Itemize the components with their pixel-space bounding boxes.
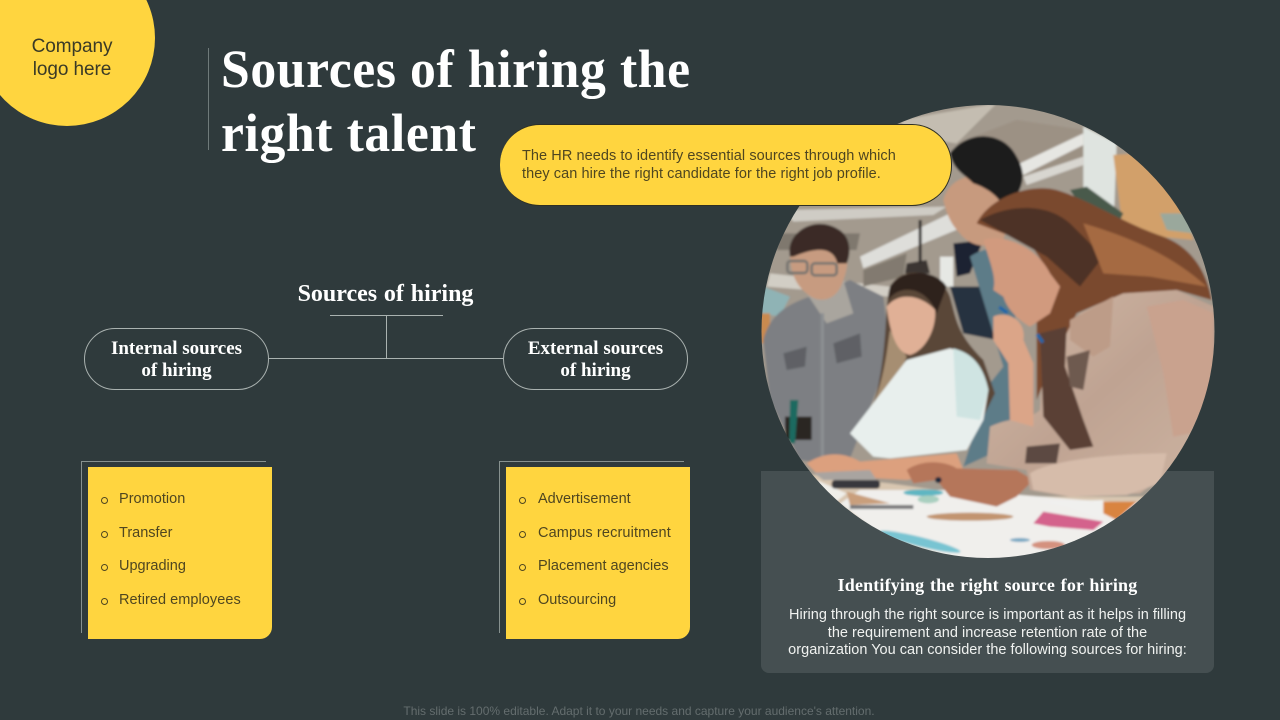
external list: Placement agencies: [538, 558, 669, 574]
external list: Campus recruitment: [538, 525, 671, 541]
logo badge: [0, 0, 155, 126]
logo text: logo here: [33, 59, 111, 80]
man left: [763, 280, 890, 467]
panel heading: Identifying the right source for hiring: [838, 575, 1137, 595]
logo text: Company: [32, 36, 112, 57]
internal list: [88, 467, 272, 639]
external list: [506, 467, 690, 639]
logo text: [32, 36, 112, 80]
pill: internal: Internal sources: [111, 338, 242, 359]
pill: external: [503, 328, 688, 390]
callout text: they can hire the right candidate for the right job profile.: [522, 166, 881, 182]
centre woman face: [887, 297, 935, 355]
right woman hair: [977, 188, 1212, 400]
right woman fist: [993, 315, 1033, 427]
blouse collar: [1070, 297, 1113, 357]
centre woman blouse: [850, 348, 988, 458]
pill: external: of hiring: [560, 360, 631, 381]
internal list: Retired employees: [119, 592, 241, 608]
back man head: [942, 176, 1006, 248]
panel text: the requirement and increase retention rate of the: [828, 624, 1147, 640]
external list: Advertisement: [538, 491, 631, 507]
external list: Outsourcing: [538, 592, 616, 608]
right woman hand: [907, 462, 1033, 507]
back man shirt: [963, 249, 1016, 467]
title: Sources of hiring the: [221, 39, 691, 99]
title: [221, 39, 691, 163]
pill: internal: [84, 328, 269, 390]
panel text: [788, 607, 1187, 658]
arms: [807, 453, 963, 480]
right woman face: [983, 238, 1060, 327]
panel text: organization You can consider the following sources for hiring:: [788, 642, 1187, 658]
map blotches: [903, 489, 943, 496]
panel text: Hiring through the right source is important as it helps in filling: [789, 607, 1186, 623]
centre woman hair: [874, 272, 996, 414]
internal list: Upgrading: [119, 558, 186, 574]
title: right talent: [221, 103, 477, 163]
callout text: [522, 148, 896, 182]
pill: internal: of hiring: [141, 360, 212, 381]
connector: [269, 315, 503, 359]
right woman blouse: [987, 290, 1214, 497]
photo: team around a table: [762, 105, 1214, 558]
diagram heading: Sources of hiring: [298, 281, 473, 307]
callout text: The HR needs to identify essential sources through which: [522, 148, 896, 164]
callout: [500, 124, 952, 206]
photo panel backdrop: [761, 471, 1214, 673]
external frame: [499, 461, 684, 633]
internal list: Promotion: [119, 491, 185, 507]
pill: external: External sources: [528, 338, 663, 359]
footer note: This slide is 100% editable. Adapt it to your needs and capture your audience's attention.: [403, 704, 875, 718]
internal list: Transfer: [119, 525, 172, 541]
plant: [1070, 186, 1124, 220]
internal frame: [81, 461, 266, 633]
ceiling: [762, 105, 1214, 498]
table: [812, 474, 1144, 552]
